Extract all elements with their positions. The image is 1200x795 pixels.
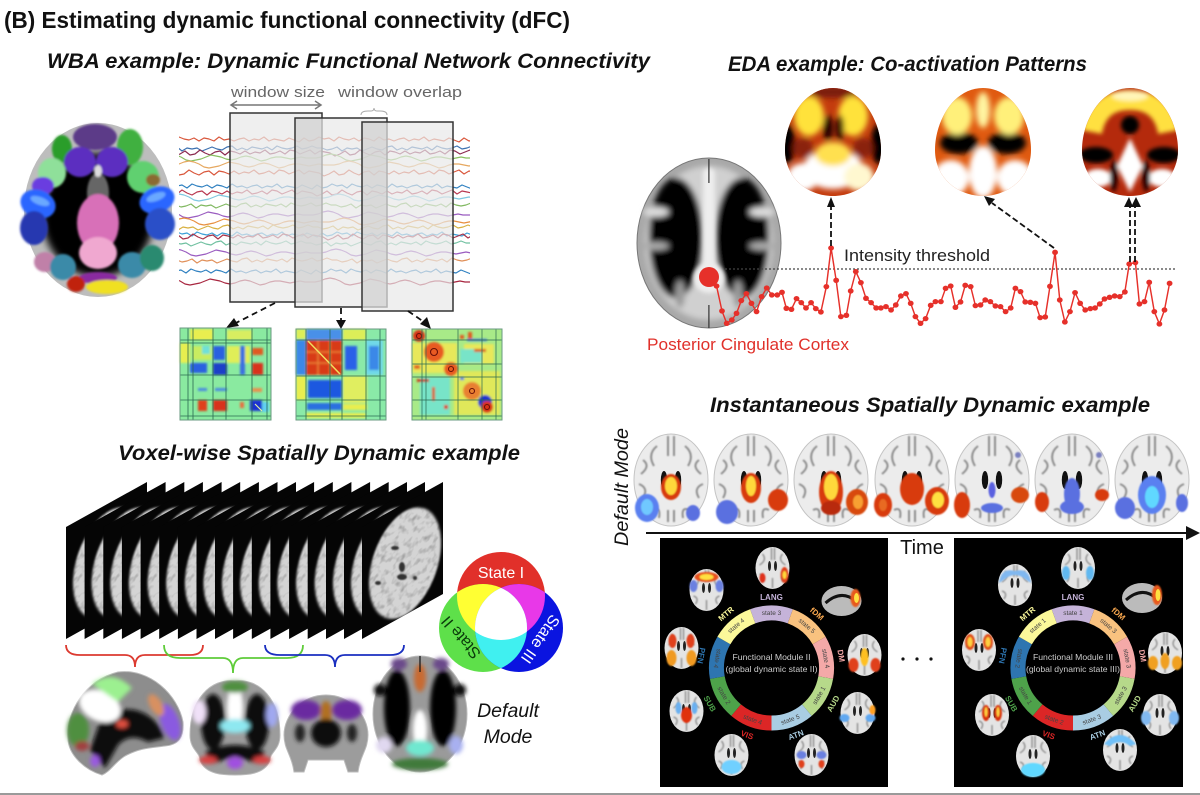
heading: voxel-wise example: Voxel-wise Spatially Dynamic example <box>118 442 520 465</box>
label: intensity threshold: Intensity threshold <box>844 246 990 265</box>
network names: SUB <box>701 694 718 714</box>
brace: window overlap <box>361 108 387 115</box>
state labels: state 3 <box>762 610 782 617</box>
brain frame 4 <box>874 434 949 526</box>
network names: LANG <box>1062 593 1084 602</box>
module panel II <box>660 538 888 787</box>
panel: EDA example <box>637 53 1181 354</box>
state ring <box>716 613 827 723</box>
co-activation map 2 <box>933 86 1033 198</box>
state labels: state 3 <box>1098 617 1118 635</box>
network names: DM <box>835 649 846 663</box>
state labels: state 4 <box>712 648 722 669</box>
state labels: state 3 <box>1082 713 1103 727</box>
module II caption: (global dynamic state II) <box>726 665 818 674</box>
heading: WBA example: WBA example: Dynamic Functional Network Connectivity <box>47 50 651 73</box>
network brains <box>664 547 882 776</box>
state labels: state 3 <box>1122 648 1132 669</box>
label: time: Time <box>900 537 944 559</box>
state labels: state 4 <box>742 714 763 727</box>
network names: DM <box>1137 649 1148 663</box>
network names: VIS <box>1041 729 1057 742</box>
label: default mode (second line): Mode <box>484 726 533 748</box>
network names: fDM <box>1110 606 1127 623</box>
ellipsis between modules <box>901 657 933 661</box>
network names: AUD <box>825 694 842 714</box>
network names: fDM <box>808 606 826 623</box>
network brains <box>962 547 1182 777</box>
network names: PFN <box>997 647 1008 664</box>
seed brain <box>637 158 781 328</box>
state labels: state 1 <box>1028 617 1048 635</box>
state labels: state 4 <box>727 617 746 635</box>
time arrow <box>646 532 1188 534</box>
state labels: state 4 <box>820 648 830 669</box>
fMRI volume stack <box>66 482 443 639</box>
panel: voxel-wise spatially dynamic example <box>66 442 563 775</box>
axis label: default mode: Default Mode <box>612 428 633 546</box>
brain frame 7 <box>1115 434 1189 526</box>
seed region: posterior cingulate <box>699 267 719 287</box>
network names: MTR <box>717 605 736 623</box>
module III caption: (global dynamic state III) <box>1026 665 1120 674</box>
state labels: state 1 <box>1063 610 1083 617</box>
state labels: state 2 <box>1013 648 1023 669</box>
arrows from windows to matrices <box>226 303 431 329</box>
state labels <box>1013 610 1132 727</box>
network names: MTR <box>1018 605 1037 623</box>
venn diagram of states <box>439 552 563 672</box>
label: default mode: Default <box>477 700 540 722</box>
label: state II: State II <box>439 612 485 662</box>
panel: instantaneous spatially dynamic example <box>612 394 1200 787</box>
heading: instantaneous example: Instantaneous Spatially Dynamic example <box>710 394 1150 417</box>
state labels: state 3 <box>1113 685 1129 706</box>
label: window size: window size <box>230 84 325 101</box>
network names: ATN <box>1088 728 1107 742</box>
brace: state I windows <box>66 645 203 667</box>
signal trace <box>709 248 1170 324</box>
module II caption: Functional Module II <box>732 653 810 662</box>
state ring <box>1018 613 1128 723</box>
brain parcellation map <box>16 123 178 297</box>
network names <box>997 593 1148 742</box>
connectivity matrix 1 <box>180 328 271 420</box>
state labels: state 1 <box>1017 686 1033 706</box>
module III caption: Functional Module III <box>1033 653 1113 662</box>
network names: SUB <box>1003 694 1019 714</box>
brain: axial default mode map <box>373 656 467 772</box>
threshold line <box>725 268 1177 270</box>
brain frame 5 <box>954 434 1029 526</box>
brain frame 3 <box>794 434 868 526</box>
module panel III <box>954 538 1183 787</box>
bottom rule <box>0 793 1200 795</box>
state labels: state 2 <box>1044 714 1065 727</box>
network names: PFN <box>695 647 707 664</box>
label: state III: State III <box>517 611 562 666</box>
state labels: state 5 <box>780 713 801 727</box>
brace: state III windows <box>265 645 404 667</box>
state labels <box>712 610 830 727</box>
arrow head <box>1186 526 1200 540</box>
module III caption <box>1026 653 1120 674</box>
connectivity matrix 2 <box>296 329 386 420</box>
panel: WBA example <box>16 50 651 420</box>
time series traces <box>179 136 470 286</box>
brain: coronal default mode map <box>190 681 280 775</box>
state labels: state 2 <box>716 686 732 706</box>
title: (B) Estimating dynamic functional connectivity (dFC) <box>4 7 570 33</box>
dashed arrows to maps <box>827 196 1141 262</box>
network names: LANG <box>760 593 783 602</box>
time series of brains <box>634 434 1189 526</box>
state labels: state 1 <box>812 685 828 706</box>
network names: VIS <box>739 729 755 742</box>
heading: EDA example: EDA example: Co-activation Patterns <box>728 53 1087 76</box>
sliding windows <box>230 113 453 311</box>
brain: sagittal default mode map <box>67 672 185 775</box>
brain frame 2 <box>714 434 788 526</box>
connectivity matrix 3 <box>412 329 502 420</box>
arrow: window size span <box>231 101 321 109</box>
co-activation map 3 <box>1079 86 1181 198</box>
network names: AUD <box>1127 694 1143 714</box>
label: posterior cingulate cortex: Posterior Cingulate Cortex <box>647 335 849 354</box>
state labels: state 5 <box>797 617 817 635</box>
co-activation map 1 <box>785 88 881 196</box>
label: state I: State I <box>478 565 524 582</box>
label: window overlap: window overlap <box>337 84 462 101</box>
brain frame 6 <box>1035 434 1109 526</box>
module II caption <box>726 653 818 674</box>
brain: second coronal default mode map <box>284 695 368 772</box>
brace: state II windows <box>164 645 303 673</box>
network names: ATN <box>787 728 805 742</box>
network names <box>695 593 846 742</box>
brain frame 1 <box>634 434 708 526</box>
